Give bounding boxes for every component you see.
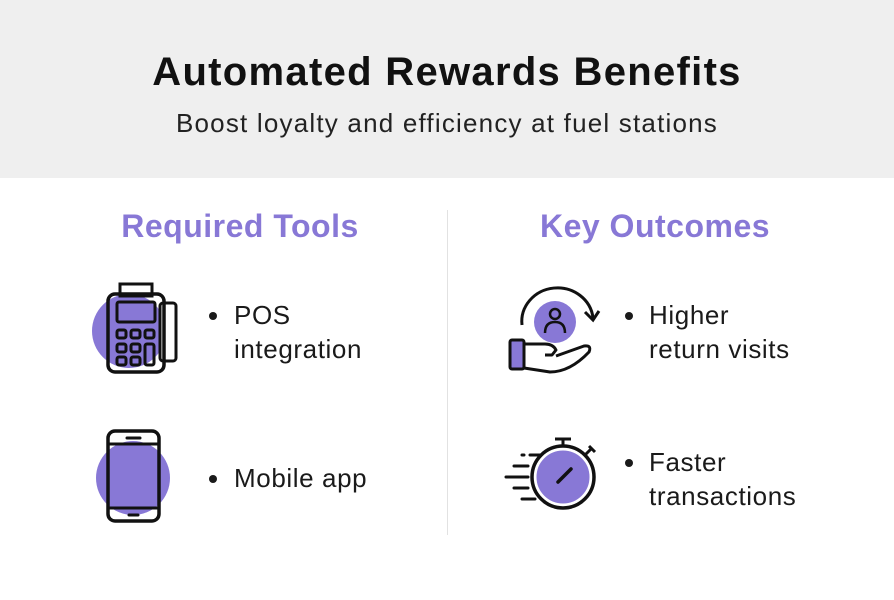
- title: Automated Rewards Benefits: [152, 50, 742, 94]
- text: Higher return visits: Higher: [649, 300, 729, 330]
- text: Faster transactions: transactions: [649, 481, 796, 511]
- text: POS integration: [209, 300, 362, 364]
- icon: hand with customer: [508, 286, 600, 374]
- icon: POS terminal: [92, 282, 178, 374]
- heading: Key Outcomes: Key Outcomes: [540, 208, 770, 244]
- text: Faster transactions: Faster: [649, 447, 726, 477]
- subtitle: Boost loyalty and efficiency at fuel stations: [176, 108, 718, 138]
- text: POS integration: POS: [234, 300, 291, 330]
- text: Higher return visits: [625, 300, 790, 364]
- text: Faster transactions: [625, 447, 796, 511]
- text: Mobile app: Mobile app: [234, 463, 367, 493]
- icon: fast stopwatch: [504, 438, 596, 510]
- icon: mobile phone: [96, 429, 170, 523]
- header band: [0, 0, 894, 178]
- text: POS integration: integration: [234, 334, 362, 364]
- heading: Required Tools: Required Tools: [121, 208, 359, 244]
- text: Higher return visits: return visits: [649, 334, 790, 364]
